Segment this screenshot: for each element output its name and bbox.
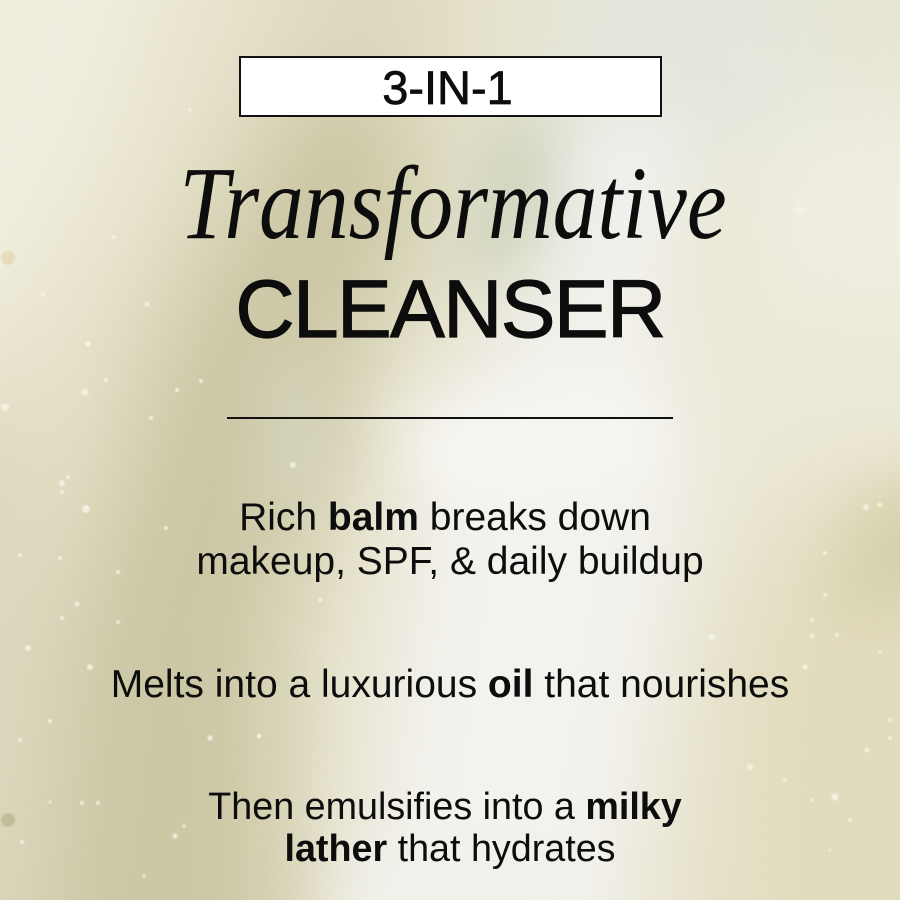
text block: balm: makeup, SPF, & daily buildup <box>196 540 704 583</box>
title: Transformative: Transformative <box>179 146 727 261</box>
text block: milky lather <box>208 785 682 869</box>
text block: balm <box>196 496 704 583</box>
text block: balm: Rich balm breaks down <box>239 496 651 539</box>
text block: milky lather: Then emulsifies into a milky <box>208 785 682 827</box>
badge: 3-IN-1 <box>239 56 662 117</box>
text block: milky lather: lather that hydrates <box>284 827 616 869</box>
title: CLEANSER: CLEANSER <box>235 264 665 355</box>
divider rule <box>227 417 673 419</box>
badge: 3-IN-1: 3-IN-1 <box>382 61 513 114</box>
text block: oil: Melts into a luxurious oil that nourishes <box>111 663 789 706</box>
